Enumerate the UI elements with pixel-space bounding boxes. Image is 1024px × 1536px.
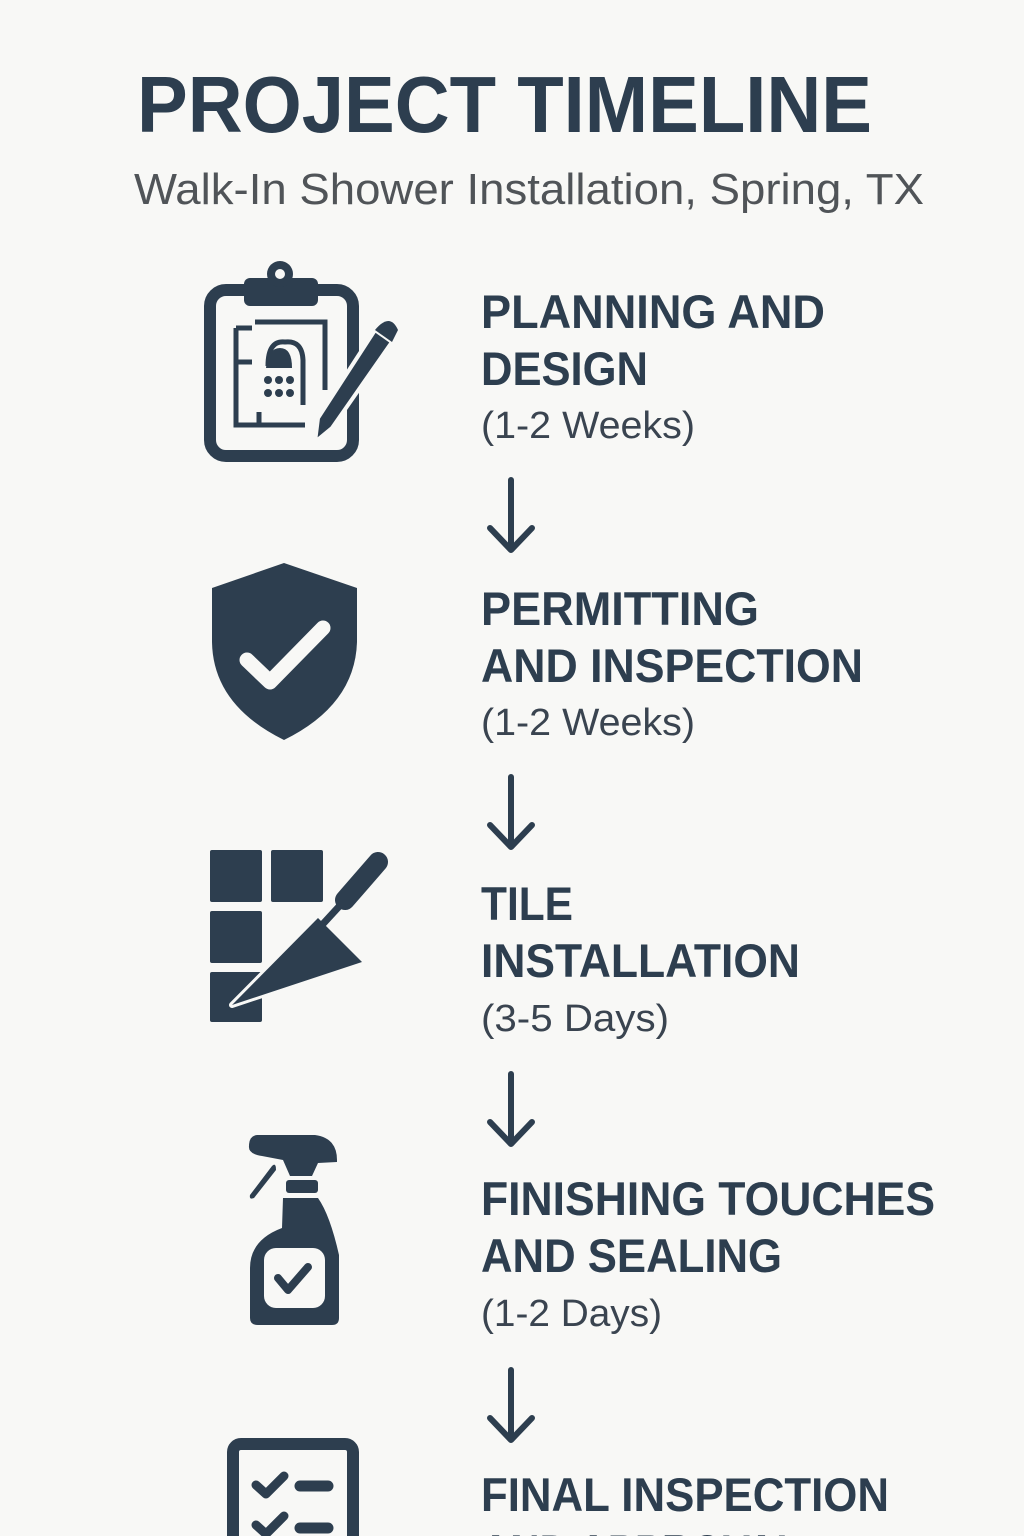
heading: permitting and inspection: AND INSPECTION (481, 639, 863, 692)
arrow 4 (490, 1370, 532, 1440)
heading: finishing touches and sealing: (1-2 Days) (481, 1293, 662, 1335)
heading: planning and design (481, 285, 825, 447)
arrow 2 (490, 777, 532, 847)
heading: planning and design: (1-2 Weeks) (481, 405, 695, 447)
heading: permitting and inspection: PERMITTING (481, 582, 759, 635)
heading: tile installation (481, 877, 800, 1040)
heading: permitting and inspection: (1-2 Weeks) (481, 702, 695, 744)
subtitle: Walk-In Shower Installation, Spring, TX (134, 165, 924, 214)
arrow 3 (490, 1074, 532, 1144)
icon: clipboard with plan and pencil (210, 261, 398, 456)
icon: shield with check (212, 563, 357, 740)
heading: final inspection and approval: FINAL INSPECTION (481, 1468, 889, 1521)
arrow 1 (490, 480, 532, 550)
heading: tile installation: INSTALLATION (481, 934, 800, 987)
heading: planning and design: PLANNING AND (481, 285, 825, 338)
heading: finishing touches and sealing: AND SEALING (481, 1229, 782, 1282)
heading: tile installation: (3-5 Days) (481, 998, 669, 1040)
heading: finishing touches and sealing (481, 1172, 935, 1335)
heading: finishing touches and sealing: FINISHING TOUCHES (481, 1172, 935, 1225)
icon: tiles and trowel (210, 850, 378, 1022)
heading: permitting and inspection (481, 582, 863, 744)
icon: checklist (233, 1444, 353, 1536)
heading: planning and design: DESIGN (481, 342, 648, 395)
icon: spray bottle (249, 1135, 339, 1325)
heading: tile installation: TILE (481, 877, 573, 930)
title: PROJECT TIMELINE (137, 60, 872, 149)
